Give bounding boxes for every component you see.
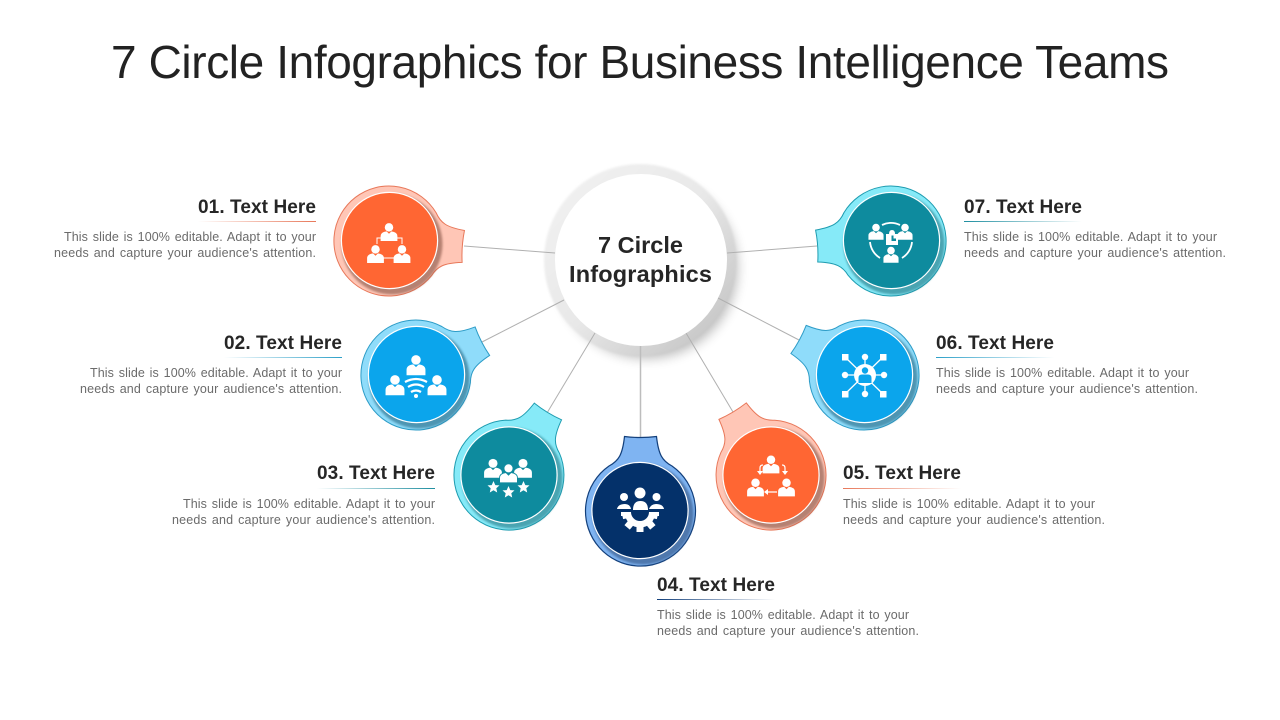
text 03 bbox=[172, 463, 435, 527]
icon: rated team bbox=[484, 459, 532, 498]
text 07 bbox=[964, 197, 1226, 260]
node 03 bbox=[172, 383, 595, 551]
text 02: This slide is 100% editable. Adapt it to your bbox=[90, 366, 342, 380]
node 04 bbox=[586, 436, 919, 638]
text 03: 03. Text Here bbox=[317, 463, 435, 484]
hub label: 7 Circle bbox=[598, 232, 683, 258]
text 06 bbox=[936, 333, 1198, 396]
gear half bbox=[621, 512, 659, 532]
connector lines bbox=[464, 246, 817, 437]
text 06: needs and capture your audience's attention. bbox=[936, 382, 1198, 396]
text 03: needs and capture your audience's attention. bbox=[172, 513, 435, 527]
center hub ring and shadow bbox=[544, 164, 737, 358]
text 05: This slide is 100% editable. Adapt it to your bbox=[843, 497, 1095, 511]
text 05: 05. Text Here bbox=[843, 463, 961, 484]
text 06: 06. Text Here bbox=[936, 333, 1054, 354]
text 01: This slide is 100% editable. Adapt it to your bbox=[64, 230, 316, 244]
badge 04 bbox=[586, 436, 696, 566]
text 04 bbox=[657, 575, 919, 638]
text 04: This slide is 100% editable. Adapt it to your bbox=[657, 608, 909, 622]
badge 05 bbox=[685, 383, 847, 551]
text 07: needs and capture your audience's attention. bbox=[964, 246, 1226, 260]
icon: hierarchy team bbox=[367, 223, 410, 263]
text 07: 07. Text Here bbox=[964, 197, 1082, 218]
text 05: needs and capture your audience's attention. bbox=[843, 513, 1105, 527]
icon: network person bbox=[842, 354, 887, 398]
text 01 bbox=[54, 197, 316, 260]
badge 03 bbox=[433, 383, 595, 551]
icon: team with gear bbox=[617, 488, 664, 532]
title: 7 Circle Infographics for Business Intelligence Teams bbox=[111, 36, 1169, 88]
node 07 bbox=[813, 182, 1226, 301]
text 01: needs and capture your audience's attention. bbox=[54, 246, 316, 260]
text 05 bbox=[843, 463, 1105, 527]
badge 01 bbox=[330, 182, 467, 301]
text 02: 02. Text Here bbox=[224, 333, 342, 354]
node 05 bbox=[685, 383, 1105, 551]
hub label bbox=[569, 232, 712, 287]
text 07: This slide is 100% editable. Adapt it to your bbox=[964, 230, 1217, 244]
icon: wireless team bbox=[386, 355, 446, 398]
text 01: 01. Text Here bbox=[198, 197, 316, 218]
badge 07 bbox=[813, 182, 950, 301]
node 02 bbox=[80, 292, 507, 449]
hub label: Infographics bbox=[569, 261, 712, 287]
text 03: This slide is 100% editable. Adapt it to your bbox=[183, 497, 435, 511]
text 02: needs and capture your audience's attention. bbox=[80, 382, 342, 396]
badge 06 bbox=[772, 291, 939, 450]
center hub circle bbox=[555, 174, 727, 346]
badge 02 bbox=[342, 292, 507, 449]
text 04: needs and capture your audience's attention. bbox=[657, 624, 919, 638]
node 06 bbox=[772, 291, 1198, 450]
node 01 bbox=[54, 182, 467, 301]
icon: team puzzle bbox=[868, 223, 913, 263]
text 02 bbox=[80, 333, 342, 396]
text 04: 04. Text Here bbox=[657, 575, 775, 596]
icon: team cycle bbox=[747, 456, 795, 496]
text 06: This slide is 100% editable. Adapt it to your bbox=[936, 366, 1189, 380]
